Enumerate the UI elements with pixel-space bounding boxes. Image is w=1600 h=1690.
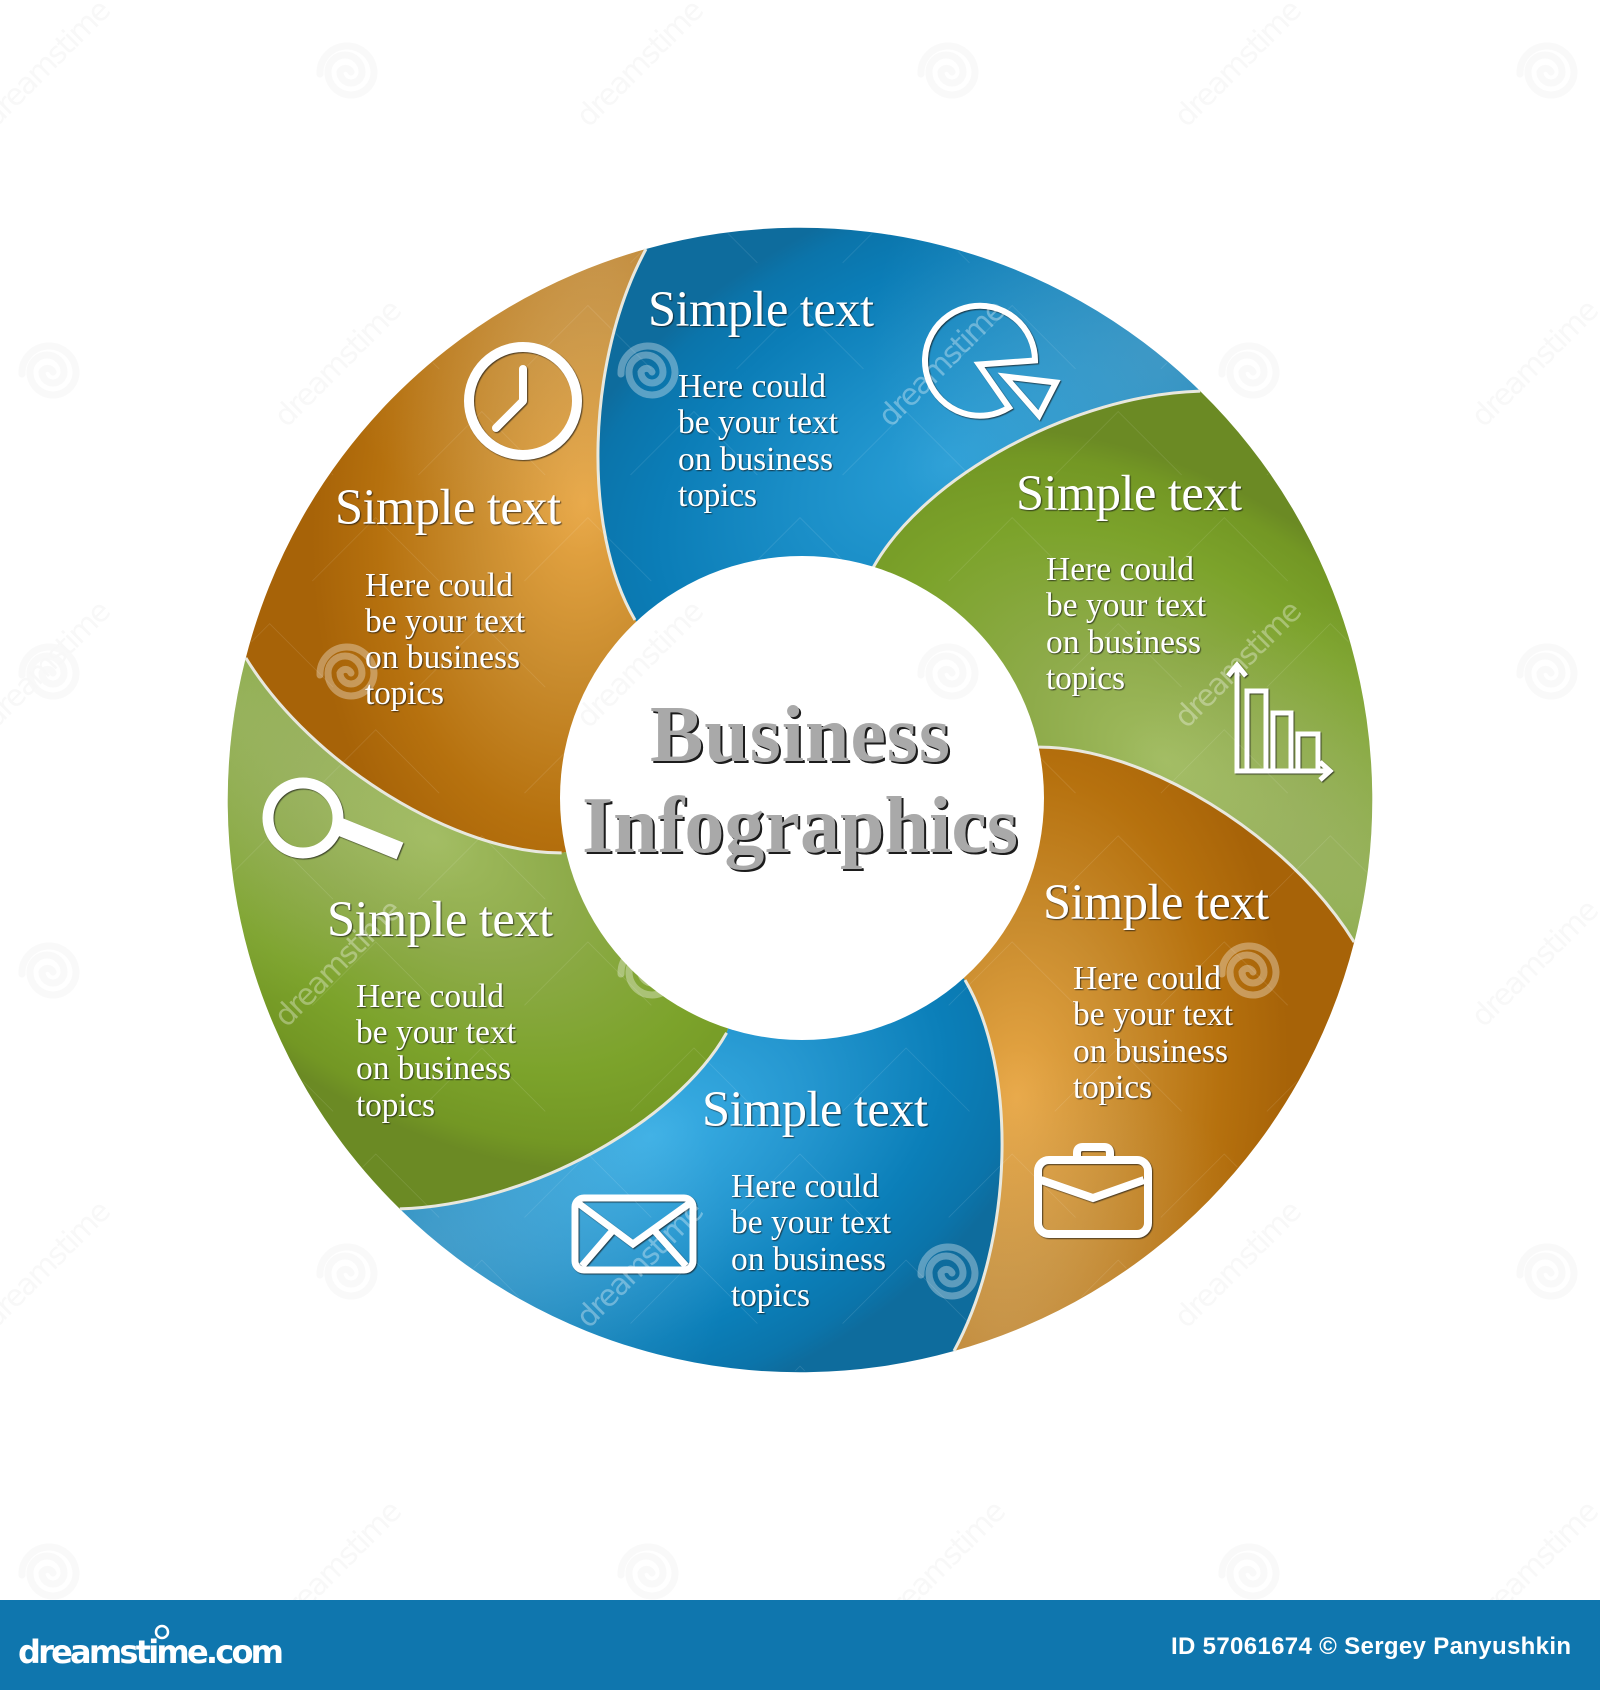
watermark: spirals and wordmarks over ring — [268, 293, 1309, 1335]
watermark: centre spiral and wordmark: dreamstime — [570, 594, 711, 735]
text block: right green: on business — [1046, 624, 1201, 661]
panel: upper left orange segment — [203, 167, 1000, 975]
text block: right green — [1046, 551, 1207, 697]
text block: upper left orange — [365, 567, 526, 712]
watermark: spirals and wordmarks over ring: dreamstime — [872, 293, 1013, 434]
text block: left green: be your text — [356, 1014, 517, 1051]
watermark: background spirals and wordmarks: dreamstime — [872, 1494, 1013, 1635]
watermark: spirals and wordmarks over ring: dreamstime — [570, 1194, 711, 1335]
icon: envelope — [575, 1198, 693, 1270]
watermark: background spirals and wordmarks: dreamstime — [268, 1494, 409, 1635]
text block: right green: be your text — [1046, 587, 1207, 624]
heading: lower right orange: Simple text — [1043, 874, 1269, 930]
text block: lower right orange: on business — [1073, 1033, 1228, 1070]
panel: top blue segment — [598, 228, 1200, 800]
text block: lower right orange: Here could — [1073, 960, 1221, 997]
text block: left green: on business — [356, 1050, 511, 1087]
text block: top blue: Here could — [678, 368, 826, 405]
text block: right green: topics — [1046, 660, 1125, 697]
icon: pie chart — [925, 306, 1056, 416]
watermark: spirals and wordmarks over ring: dreamstime — [268, 893, 409, 1034]
heading: top blue: Simple text — [648, 281, 874, 337]
text block: top blue — [678, 368, 839, 514]
panel: right green segment — [699, 339, 1496, 1147]
icon: briefcase — [1038, 1147, 1148, 1234]
text block: bottom blue: be your text — [731, 1204, 892, 1241]
text block: bottom blue: on business — [731, 1241, 886, 1278]
watermark: background spirals and wordmarks: dreamstime — [268, 293, 409, 434]
footer logo spiral — [156, 1626, 168, 1638]
watermark: background spirals and wordmarks: dreamstime — [1168, 1194, 1309, 1335]
title: Business — [650, 691, 950, 779]
text block: left green: Here could — [356, 978, 504, 1015]
text block: lower right orange: be your text — [1073, 996, 1234, 1033]
heading: left green: Simple text — [327, 891, 553, 947]
text block: top blue: on business — [678, 441, 833, 478]
panel: bottom blue segment — [400, 800, 1002, 1372]
text block: bottom blue — [731, 1168, 892, 1314]
heading: upper left orange: Simple text — [335, 479, 561, 535]
text block: upper left orange: Here could — [365, 567, 513, 604]
text block: top blue: topics — [678, 477, 757, 514]
icon: clock — [469, 347, 577, 455]
icon: magnifying glass — [268, 783, 400, 853]
watermark lattice over ring — [229, 229, 1371, 1371]
heading: right green: Simple text — [1016, 465, 1242, 521]
watermark: centre spiral and wordmark — [570, 594, 975, 735]
title — [582, 691, 1018, 870]
text block: upper left orange: on business — [365, 639, 520, 676]
panel: lower right orange segment — [600, 625, 1397, 1433]
panel: left green segment — [104, 453, 901, 1261]
text block: left green — [356, 978, 517, 1124]
watermark: spirals and wordmarks over ring: dreamstime — [1168, 594, 1309, 735]
icon: bar chart with arrows — [1228, 665, 1330, 780]
footer logo: dreamstime.com — [18, 1633, 284, 1671]
text block: bottom blue: topics — [731, 1277, 810, 1314]
heading: bottom blue: Simple text — [702, 1081, 928, 1137]
text block: lower right orange: topics — [1073, 1069, 1152, 1106]
title: Infographics — [582, 782, 1018, 870]
footer credit: ID 57061674 © Sergey Panyushkin — [1171, 1633, 1571, 1660]
central white circle — [560, 556, 1044, 1040]
text block: upper left orange: be your text — [365, 603, 526, 640]
text block: bottom blue: Here could — [731, 1168, 879, 1205]
text block: lower right orange — [1073, 960, 1234, 1106]
text block: upper left orange: topics — [365, 675, 444, 712]
text block: left green: topics — [356, 1087, 435, 1124]
segment divider curves — [222, 249, 1378, 1351]
text block: top blue: be your text — [678, 404, 839, 441]
footer bar — [0, 1600, 1600, 1690]
text block: right green: Here could — [1046, 551, 1194, 588]
